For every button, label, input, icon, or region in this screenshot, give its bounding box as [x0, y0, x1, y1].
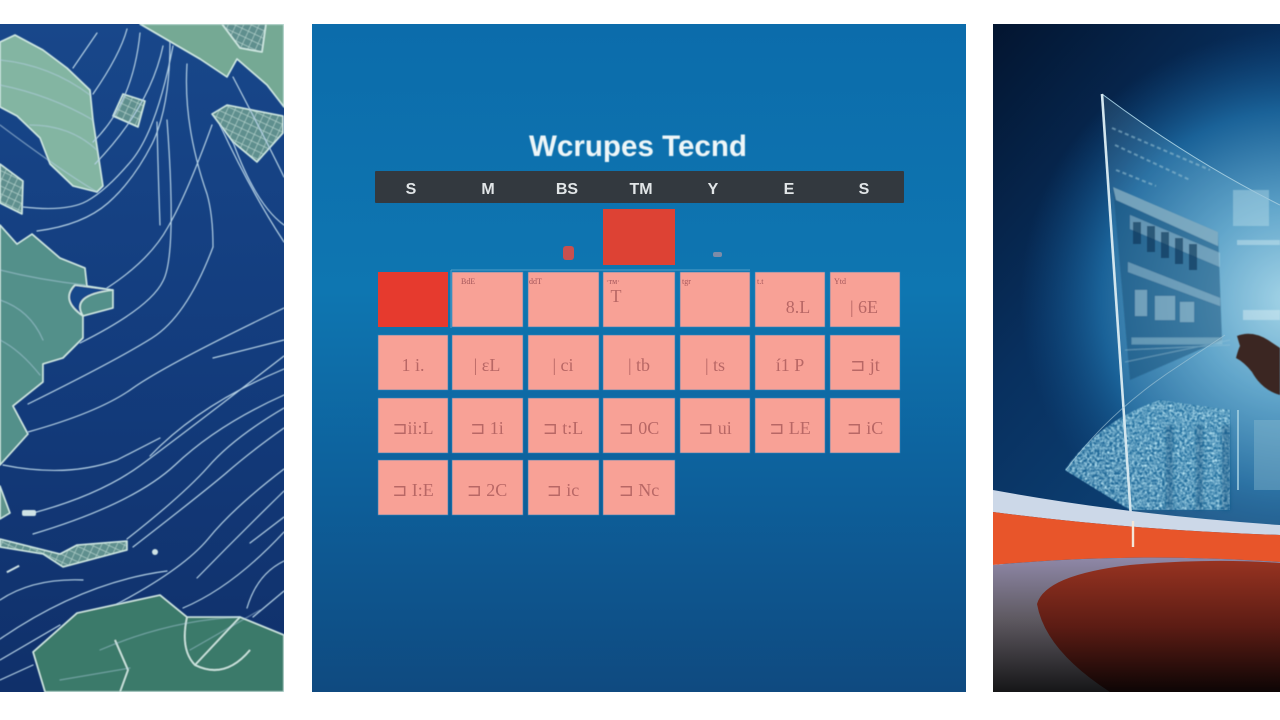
- calendar row 2: | εL: [474, 355, 500, 375]
- calendar row 2: | tb: [628, 355, 650, 375]
- calendar row 3: [378, 398, 900, 453]
- calendar row 1: ·ᴛᴍ·: [606, 277, 620, 286]
- calendar row 4: ⊐ Nc: [619, 480, 659, 500]
- weekday header bar: [375, 171, 904, 203]
- calendar row 1: T: [610, 286, 622, 306]
- calendar row 2: ⊐ jt: [850, 355, 880, 375]
- title: Wcrupes Tecnd: [529, 130, 747, 163]
- calendar row 4: ⊐ ic: [547, 480, 579, 500]
- calendar row 2: 1 i.: [401, 355, 425, 375]
- small grey mark: [713, 252, 722, 257]
- calendar row 2: [378, 335, 900, 390]
- calendar row 3: ⊐ iC: [847, 418, 883, 438]
- calendar row 1: 8.L: [786, 297, 810, 317]
- calendar row 1: Ytd: [834, 277, 846, 286]
- screen glowing columns: [1065, 400, 1230, 510]
- calendar row 4: ⊐ 2C: [467, 480, 507, 500]
- highlighted red cell: [603, 209, 675, 265]
- weekday header bar: BS: [556, 181, 578, 198]
- calendar row 1: BdE: [461, 277, 475, 286]
- panel: weather map: [0, 24, 284, 692]
- weekday header bar: S: [859, 181, 870, 198]
- calendar row 1: tgr: [682, 277, 691, 286]
- small red mark: [563, 246, 574, 260]
- calendar row 4: [378, 460, 675, 515]
- calendar row 1: t.t: [757, 277, 764, 286]
- calendar row 3: ⊐ii:L: [392, 418, 434, 438]
- presenter hand: [1236, 334, 1280, 395]
- panel: weekly trend calendar: [312, 24, 966, 692]
- calendar row 3: ⊐ LE: [769, 418, 811, 438]
- orange stage band: [993, 512, 1280, 565]
- calendar row 1: [378, 270, 900, 328]
- weekday header bar: S: [406, 181, 417, 198]
- weekday header bar: Y: [708, 181, 719, 198]
- map small marks: [6, 510, 158, 573]
- calendar row 2: í1 P: [776, 355, 804, 375]
- calendar row 4: ⊐ I:E: [392, 480, 434, 500]
- stage floor: [993, 558, 1280, 692]
- isobar contour lines: [0, 29, 284, 680]
- screen data blocks: [1112, 128, 1280, 380]
- calendar row 2: | ci: [552, 355, 574, 375]
- calendar row 1: ddT: [529, 277, 542, 286]
- weekday header bar: TM: [629, 181, 653, 198]
- map land masses: [0, 24, 284, 692]
- calendar row 3: ⊐ t:L: [543, 418, 583, 438]
- dark red podium disc: [1037, 561, 1280, 692]
- holographic glass screen: [1065, 94, 1280, 547]
- calendar row 1: | 6E: [850, 297, 878, 317]
- calendar row 3: ⊐ ui: [698, 418, 732, 438]
- calendar row 2: | ts: [705, 355, 725, 375]
- white stage band: [993, 490, 1280, 535]
- weekday header bar: E: [784, 181, 795, 198]
- calendar row 3: ⊐ 1i: [470, 418, 504, 438]
- weekday header bar: M: [481, 181, 495, 198]
- calendar row 3: ⊐ 0C: [619, 418, 659, 438]
- panel: presenter at holographic screen: [993, 24, 1280, 692]
